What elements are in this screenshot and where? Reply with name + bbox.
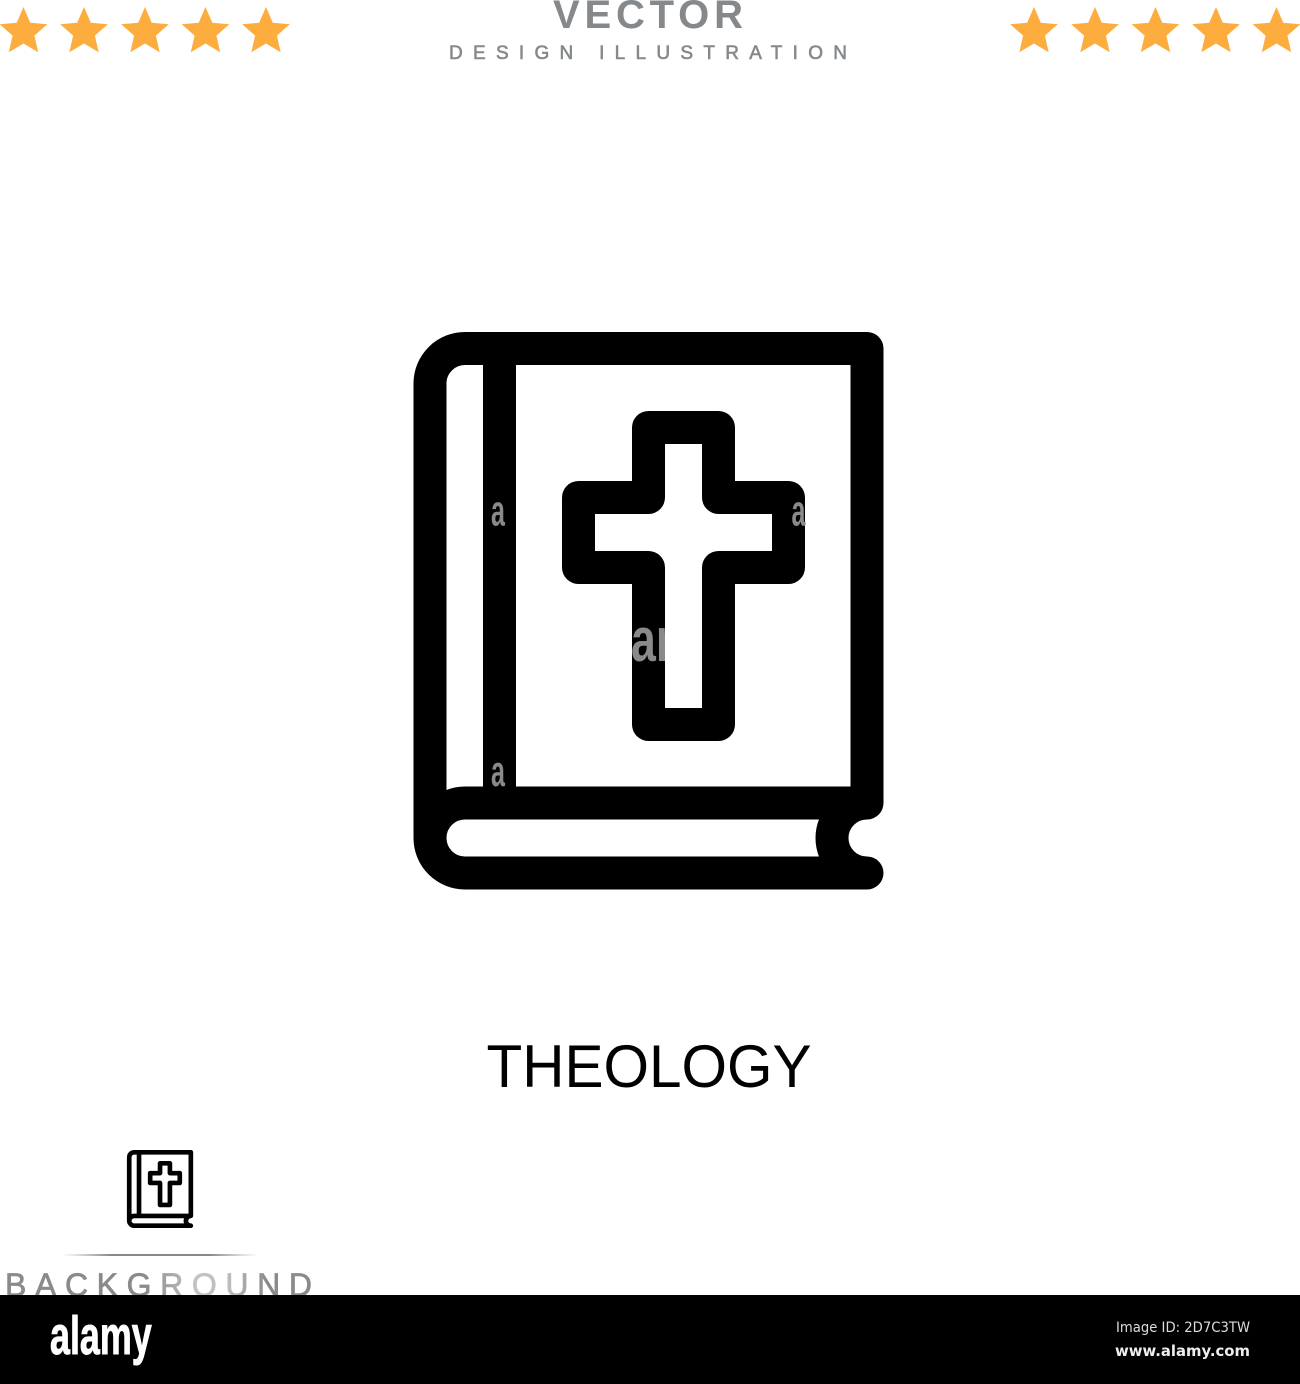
divider rule [62, 1254, 258, 1256]
label: background: BACKGROUND [5, 1267, 312, 1303]
book cover [430, 348, 867, 873]
title: theology: THEOLOGY [486, 1033, 812, 1100]
book spine line [483, 348, 516, 803]
footer image id: Image ID: 2D7C3TW [1116, 1320, 1250, 1336]
watermark letters over icon: any [631, 606, 708, 675]
footer logo: alamy: alamy [50, 1305, 152, 1366]
black footer bar [0, 1295, 1300, 1384]
subheading: design illustration: DESIGN ILLUSTRATION [449, 43, 847, 64]
cross outline [578, 428, 788, 724]
small book icon [129, 1152, 191, 1226]
left star rating [0, 7, 290, 52]
watermark letters over icon: a [491, 486, 506, 535]
watermark letters over icon [491, 486, 806, 796]
watermark letters over icon: a [792, 486, 806, 535]
icon: book with cross [430, 348, 867, 873]
right star rating [1010, 7, 1300, 52]
footer url: www.alamy.com [1115, 1342, 1250, 1360]
watermark letters over icon: a [491, 747, 506, 796]
